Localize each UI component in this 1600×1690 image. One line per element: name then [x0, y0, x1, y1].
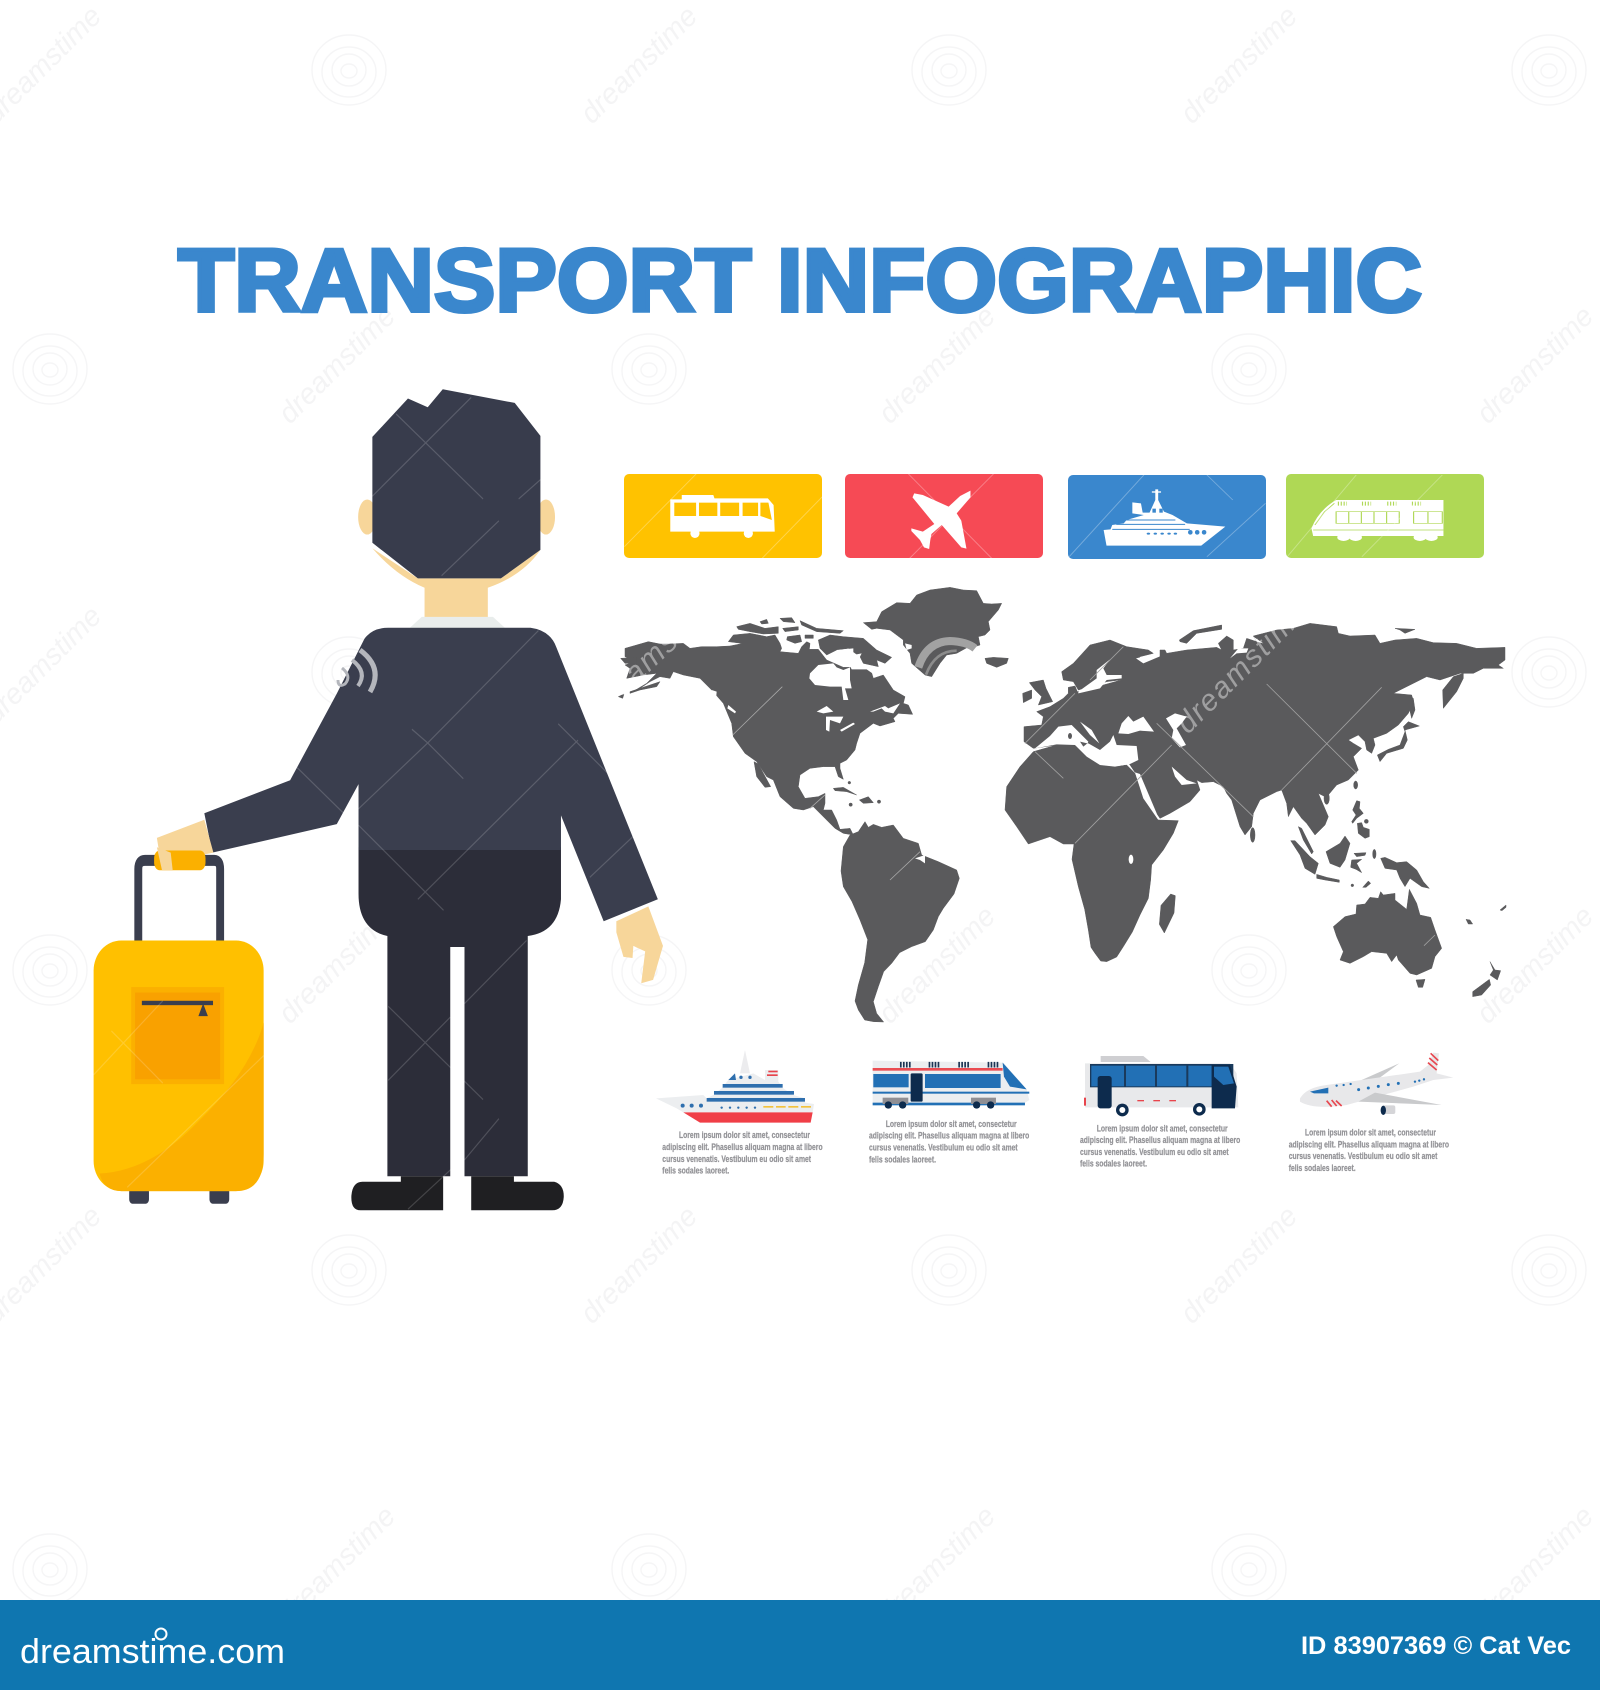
shirt collar: [410, 617, 505, 628]
tasmania: [1416, 979, 1425, 987]
watermark pattern: dreamstime: [574, 1200, 704, 1330]
borneo: [1326, 836, 1350, 867]
column: cruise ship: [656, 1050, 823, 1177]
hair: [372, 389, 540, 578]
column: bus: [1080, 1056, 1240, 1170]
watermark pattern: dreamstime: [872, 300, 1002, 430]
watermark arc on greenland: [918, 641, 975, 675]
watermark words over map: dreamstime: [1170, 595, 1315, 740]
australia: [1333, 889, 1442, 975]
text: cruise ship: cursus venenatis. Vestibulum eu odio sit amet: [662, 1154, 812, 1165]
eurasia and africa: [1005, 623, 1505, 962]
eurasia: [1024, 623, 1505, 835]
suitcase wheels: [129, 1187, 229, 1204]
column: train: [869, 1061, 1029, 1165]
illustration: bus: [1084, 1056, 1238, 1116]
madagascar: [1159, 894, 1175, 933]
watermark pattern: dreamstime: [272, 1500, 402, 1630]
baffin island: [818, 635, 892, 667]
title: TRANSPORT INFOGRAPHIC: [178, 230, 1422, 330]
trousers: [359, 847, 561, 1176]
arctic islands: [737, 618, 843, 643]
traveler with suitcase: [94, 389, 663, 1210]
text: train: cursus venenatis. Vestibulum eu odio sit amet: [869, 1142, 1018, 1153]
new zealand: [1473, 962, 1501, 997]
button: train: [1286, 474, 1484, 558]
timor: [1363, 881, 1371, 887]
watermark lines on americas: [733, 687, 920, 880]
illustration: train: [873, 1061, 1029, 1109]
southeast asia and oceania: [1291, 792, 1506, 997]
world map: [618, 587, 1506, 1022]
text: bus: adipiscing elit. Phasellus aliquam magna at libero: [1080, 1135, 1240, 1146]
left hand: [157, 820, 213, 870]
text: train: [869, 1119, 1029, 1165]
greenland: [863, 587, 1002, 677]
text: cruise ship: [662, 1130, 823, 1177]
text: airplane: [1289, 1127, 1449, 1174]
text: train: Lorem ipsum dolor sit amet, consectetur: [886, 1119, 1017, 1130]
footer bar: [0, 1600, 1600, 1690]
watermark words over map: dreamstime: [582, 582, 731, 723]
left shoe: [351, 1176, 443, 1210]
column: airplane: [1289, 1053, 1453, 1174]
footer logo: dreamstime.com: [20, 1633, 285, 1671]
suitcase handle: [138, 860, 220, 943]
watermark pattern: dreamstime: [272, 900, 402, 1030]
sakhalin and japan: [1377, 695, 1419, 762]
button: bus: [624, 474, 822, 558]
text: airplane: Lorem ipsum dolor sit amet, consectetur: [1305, 1127, 1436, 1138]
caribbean islands: [833, 787, 873, 803]
north american waters: [712, 643, 925, 863]
americas and greenland: [618, 587, 1008, 1022]
africa: [1005, 745, 1178, 962]
watermark pattern: dreamstime: [872, 900, 1002, 1030]
text: cruise ship: felis sodales laoreet.: [662, 1166, 729, 1177]
right shoe: [471, 1176, 564, 1210]
watermark pattern: dreamstime: [1174, 0, 1304, 130]
seas of eurasia: [1035, 637, 1263, 864]
java: [1317, 874, 1339, 882]
mediterranean islands: [1068, 733, 1087, 747]
suitcase shading: [100, 1023, 264, 1191]
thumb on grip: [157, 847, 173, 870]
alaska islets: [618, 657, 660, 698]
text: bus: Lorem ipsum dolor sit amet, consectetur: [1097, 1123, 1228, 1134]
transport category buttons: [624, 474, 1484, 559]
button: plane: [845, 474, 1043, 558]
text: bus: [1080, 1123, 1240, 1170]
sulawesi: [1351, 853, 1366, 873]
handle grip: [154, 850, 206, 870]
text: train: felis sodales laoreet.: [869, 1154, 936, 1165]
north america: [625, 633, 913, 835]
watermark spiral on shoulder: [338, 650, 375, 692]
watermark pattern: dreamstime: [1470, 900, 1600, 1030]
text: airplane: felis sodales laoreet.: [1289, 1163, 1356, 1174]
text: cruise ship: adipiscing elit. Phasellus aliquam magna at libero: [662, 1142, 823, 1153]
illustration: cruise ship: [656, 1050, 814, 1123]
button: ship: [1068, 475, 1266, 559]
hainan and sri lanka: [1354, 781, 1358, 789]
illustration: airplane: [1300, 1053, 1453, 1115]
watermark lines on eurasia and africa: [1025, 647, 1382, 843]
suitcase body: [94, 940, 264, 1191]
text: airplane: adipiscing elit. Phasellus aliquam magna at libero: [1289, 1139, 1449, 1150]
watermark pattern: dreamstime: [1470, 300, 1600, 430]
watermark pattern: dreamstime: [272, 300, 402, 430]
scandinavia: [1062, 640, 1153, 690]
watermark pattern: dreamstime: [1470, 1500, 1600, 1630]
text: bus: felis sodales laoreet.: [1080, 1159, 1147, 1170]
watermark pattern: dreamstime: [872, 1500, 1002, 1630]
suitcase pocket: [131, 987, 224, 1084]
watermark words over map: [582, 582, 1315, 740]
kamchatka: [1443, 673, 1463, 708]
text: cruise ship: Lorem ipsum dolor sit amet, consectetur: [679, 1130, 810, 1141]
watermark pattern: dreamstime: [1174, 1200, 1304, 1330]
pacific islets: [1466, 905, 1506, 924]
south america: [841, 822, 959, 1022]
sumatra and malay peninsula: [1291, 827, 1318, 874]
new guinea: [1381, 857, 1429, 888]
watermark lines on figure: [94, 397, 633, 1209]
zipper: [142, 1001, 213, 1005]
iceland: [985, 657, 1008, 667]
jacket: [204, 628, 658, 921]
image id and credit: ID 83907369 © Cat Vec: [1301, 1632, 1571, 1660]
britain and ireland: [1023, 680, 1053, 705]
ears and neck: [358, 499, 555, 618]
text: bus: cursus venenatis. Vestibulum eu odio sit amet: [1080, 1147, 1229, 1158]
philippines: [1352, 801, 1369, 838]
text: airplane: cursus venenatis. Vestibulum eu odio sit amet: [1289, 1151, 1438, 1162]
text: train: adipiscing elit. Phasellus aliquam magna at libero: [869, 1131, 1029, 1142]
baja california: [754, 762, 771, 787]
watermark line on australia: [1424, 935, 1435, 946]
right hand: [616, 906, 663, 983]
wrangel island: [1395, 628, 1415, 633]
watermark pattern: dreamstime: [574, 0, 704, 130]
novaya zemlya: [1179, 625, 1222, 643]
